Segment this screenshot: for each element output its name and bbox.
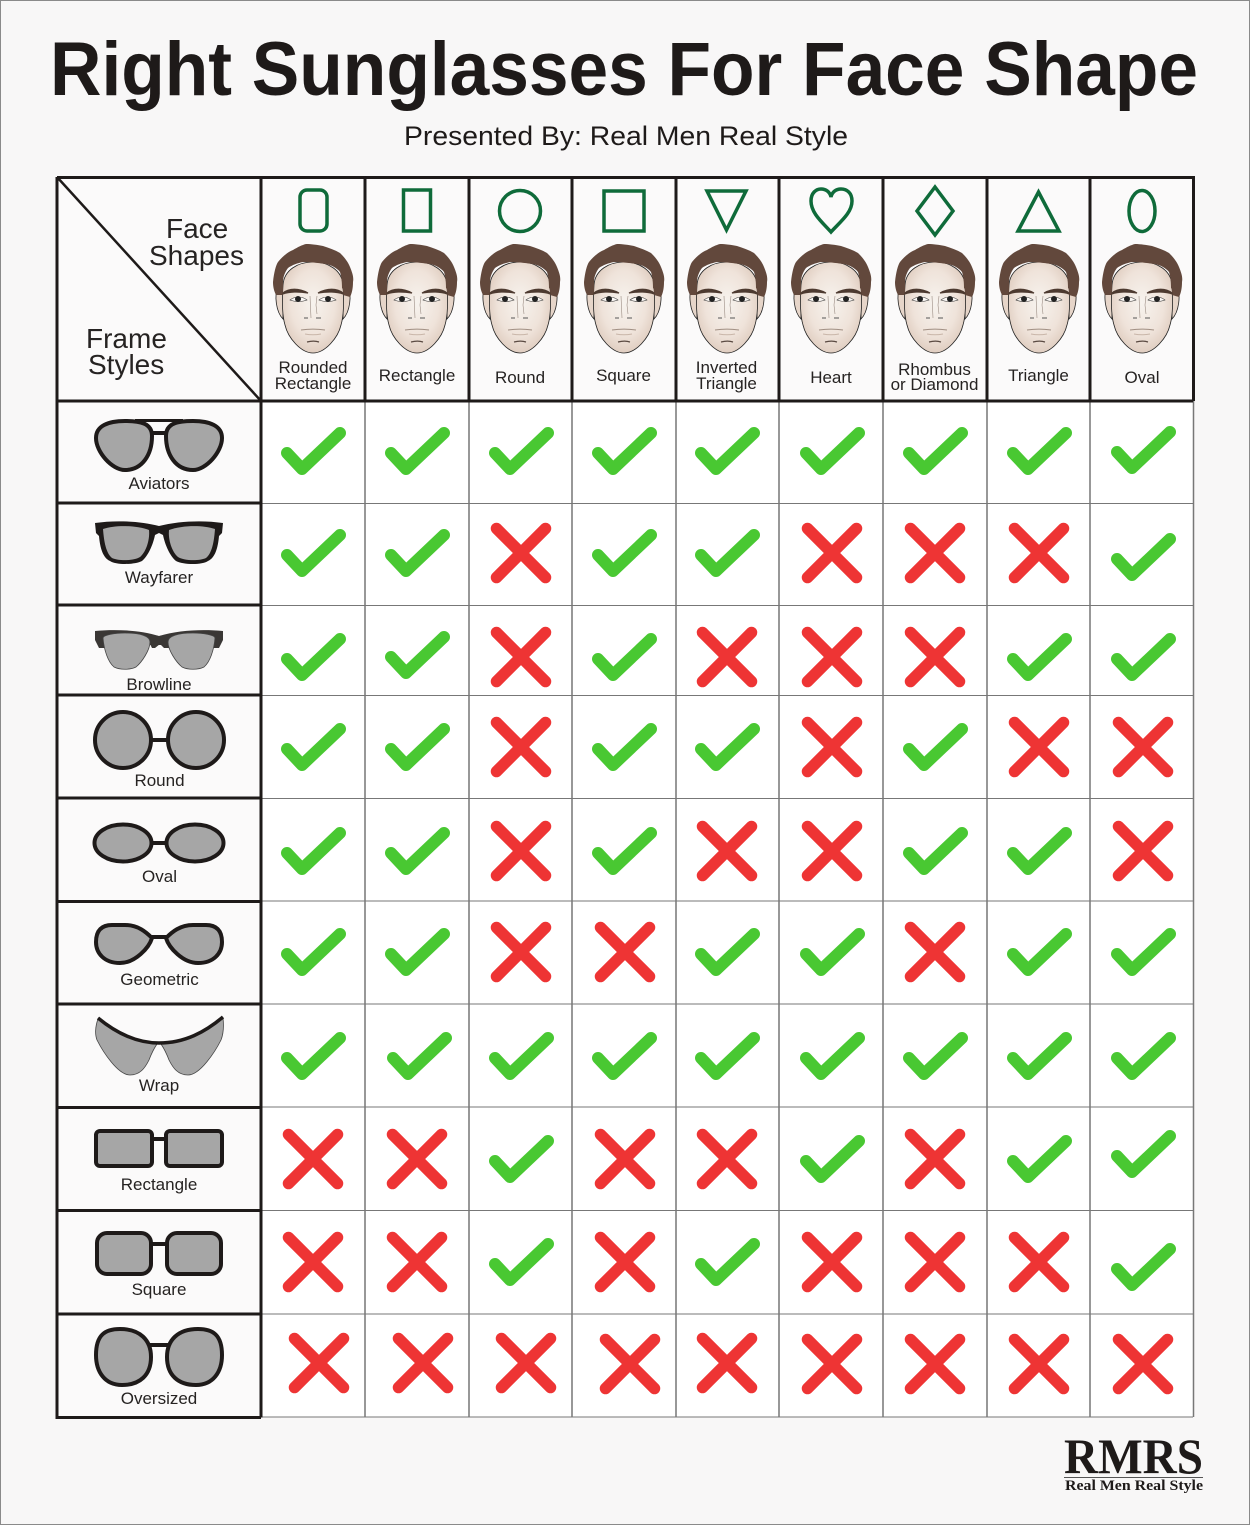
row marks: Oval (287, 826, 1168, 876)
frame: Round (95, 712, 224, 790)
frame: Geometric (96, 925, 222, 989)
corner heading: Face Shapes: Face (166, 213, 228, 244)
frame: Oval: Oval (142, 867, 177, 886)
panel: table backgrounds (57, 177, 1193, 1417)
frame: Rectangle (96, 1131, 222, 1194)
column: Round: Round (495, 368, 545, 387)
frame: Square (97, 1233, 221, 1299)
row marks: Geometric (287, 928, 1170, 976)
column: Rounded Rectangle (273, 190, 353, 393)
frame: Wrap: Wrap (139, 1076, 179, 1095)
frame: Wayfarer: Wayfarer (125, 568, 193, 587)
frame: Aviators (96, 420, 222, 493)
grid lines (57, 177, 1194, 1418)
frame: Wayfarer (95, 521, 223, 587)
row marks: Rectangle (288, 1134, 1170, 1184)
column: Square (584, 191, 664, 385)
row marks: Aviators (287, 432, 1170, 469)
corner heading: Frame Styles: Styles (88, 349, 164, 380)
subtitle: Presented By: Real Men Real Style (404, 121, 848, 151)
column: Inverted Triangle: Triangle (696, 374, 757, 393)
logo: RMRS: RMRS (1064, 1428, 1203, 1484)
frame: Browline (95, 630, 223, 694)
frame: Oval (94, 824, 224, 886)
column: Oval (1102, 190, 1182, 387)
frame: Oversized (96, 1329, 222, 1408)
column: Rounded Rectangle: Rectangle (275, 374, 351, 393)
column: Rhombus or Diamond: Rhombus (898, 360, 971, 379)
column: Square: Square (596, 366, 651, 385)
row marks: Square (288, 1238, 1170, 1286)
frame: Round: Round (134, 771, 185, 790)
column: Rectangle (377, 190, 457, 385)
column: Round (480, 190, 560, 387)
frame: Oversized: Oversized (121, 1389, 197, 1408)
title: Right Sunglasses For Face Shape (50, 27, 1198, 112)
column: Rhombus or Diamond: or Diamond (891, 375, 978, 394)
logo: RMRS: Real Men Real Style (1065, 1478, 1203, 1494)
column: Inverted Triangle: Inverted (696, 358, 757, 377)
column: Triangle: Triangle (1008, 366, 1069, 385)
corner heading: Frame Styles: Frame (86, 323, 167, 354)
column: Inverted Triangle (687, 191, 767, 393)
column: Heart (791, 189, 871, 387)
column: Triangle (999, 192, 1079, 385)
row marks: Browline (287, 632, 1170, 682)
frame: Browline: Browline (126, 675, 192, 694)
row marks: Round (287, 722, 1168, 772)
column: Rhombus or Diamond (891, 187, 978, 394)
frame: Wrap (96, 1017, 223, 1095)
frame: Square: Square (132, 1280, 186, 1299)
frame: Aviators: Aviators (128, 474, 190, 493)
frame: Geometric: Geometric (120, 970, 199, 989)
column: Oval: Oval (1125, 368, 1159, 387)
row marks: Oversized (294, 1338, 1168, 1388)
row marks: Wrap (287, 1038, 1170, 1074)
corner heading: Face Shapes: Shapes (149, 240, 244, 271)
frame: Rectangle: Rectangle (121, 1175, 197, 1194)
column: Rectangle: Rectangle (379, 366, 455, 385)
row marks: Wayfarer (287, 528, 1170, 578)
column: Rounded Rectangle: Rounded (278, 358, 348, 377)
column: Heart: Heart (810, 368, 852, 387)
